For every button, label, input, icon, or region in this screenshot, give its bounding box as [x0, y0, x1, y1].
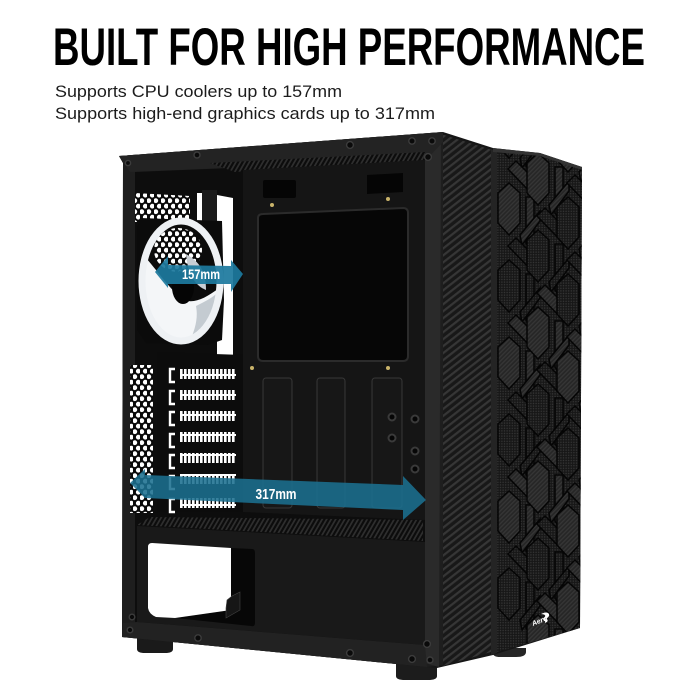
rear frame right rail — [425, 134, 441, 667]
interior — [135, 160, 425, 645]
top tray hole right — [367, 173, 403, 194]
PSU shroud — [137, 526, 425, 645]
PSU opening dark — [175, 548, 255, 626]
fan ring — [142, 221, 220, 341]
bottom rail — [122, 622, 427, 667]
label: 317mm: 317mm — [256, 486, 296, 503]
side panel edge — [491, 149, 497, 655]
screws — [125, 138, 435, 663]
tray slot 3 — [372, 378, 402, 508]
slot hooks — [170, 369, 175, 512]
PSU opening white — [148, 543, 231, 618]
top vent — [210, 152, 425, 172]
expansion slot brackets — [157, 352, 243, 512]
label: 157mm: 157mm — [182, 266, 220, 282]
foot: front — [493, 648, 526, 657]
spec line: CPU cooler: Supports CPU coolers up to 157mm — [55, 82, 342, 101]
PSU bracket — [226, 592, 240, 618]
foot: rear right — [396, 660, 437, 680]
rear white slit — [197, 193, 202, 221]
fan side blade — [186, 254, 206, 290]
fan frame — [137, 218, 224, 345]
fan — [137, 218, 224, 345]
rear honeycomb vent top — [135, 193, 190, 222]
fan blades — [144, 258, 219, 341]
top tray hole left — [263, 180, 296, 198]
fan hub — [172, 270, 194, 304]
bottom vent — [137, 517, 423, 541]
fan honeycomb — [154, 228, 202, 272]
case body — [119, 132, 582, 668]
text block: specifications — [55, 82, 435, 123]
expansion slot rows — [180, 369, 236, 508]
spec line: graphics card: Supports high-end graphics cards up to 317mm — [55, 104, 435, 123]
fan lower shade — [192, 294, 216, 336]
side carbon panel — [439, 134, 492, 667]
front hexagon panel — [497, 154, 582, 652]
gold standoffs — [250, 197, 390, 370]
front panel top edge — [493, 148, 582, 170]
motherboard tray — [243, 160, 425, 520]
tray slot 1 — [263, 378, 292, 508]
rear white opening — [217, 195, 233, 360]
rear frame top rail — [119, 132, 443, 172]
logo: Aero — [530, 615, 549, 628]
rear bracket — [202, 190, 217, 222]
arrow: 157mm cooler clearance — [155, 256, 243, 292]
foot: rear left — [137, 638, 173, 653]
CPU cutout — [258, 208, 408, 361]
arrow: 317mm graphics card clearance — [130, 469, 426, 520]
tray slot 2 — [317, 378, 345, 508]
rear frame — [119, 132, 443, 667]
black standoffs — [388, 414, 418, 472]
PC case — [119, 132, 582, 680]
rear honeycomb vent lower — [130, 365, 153, 513]
